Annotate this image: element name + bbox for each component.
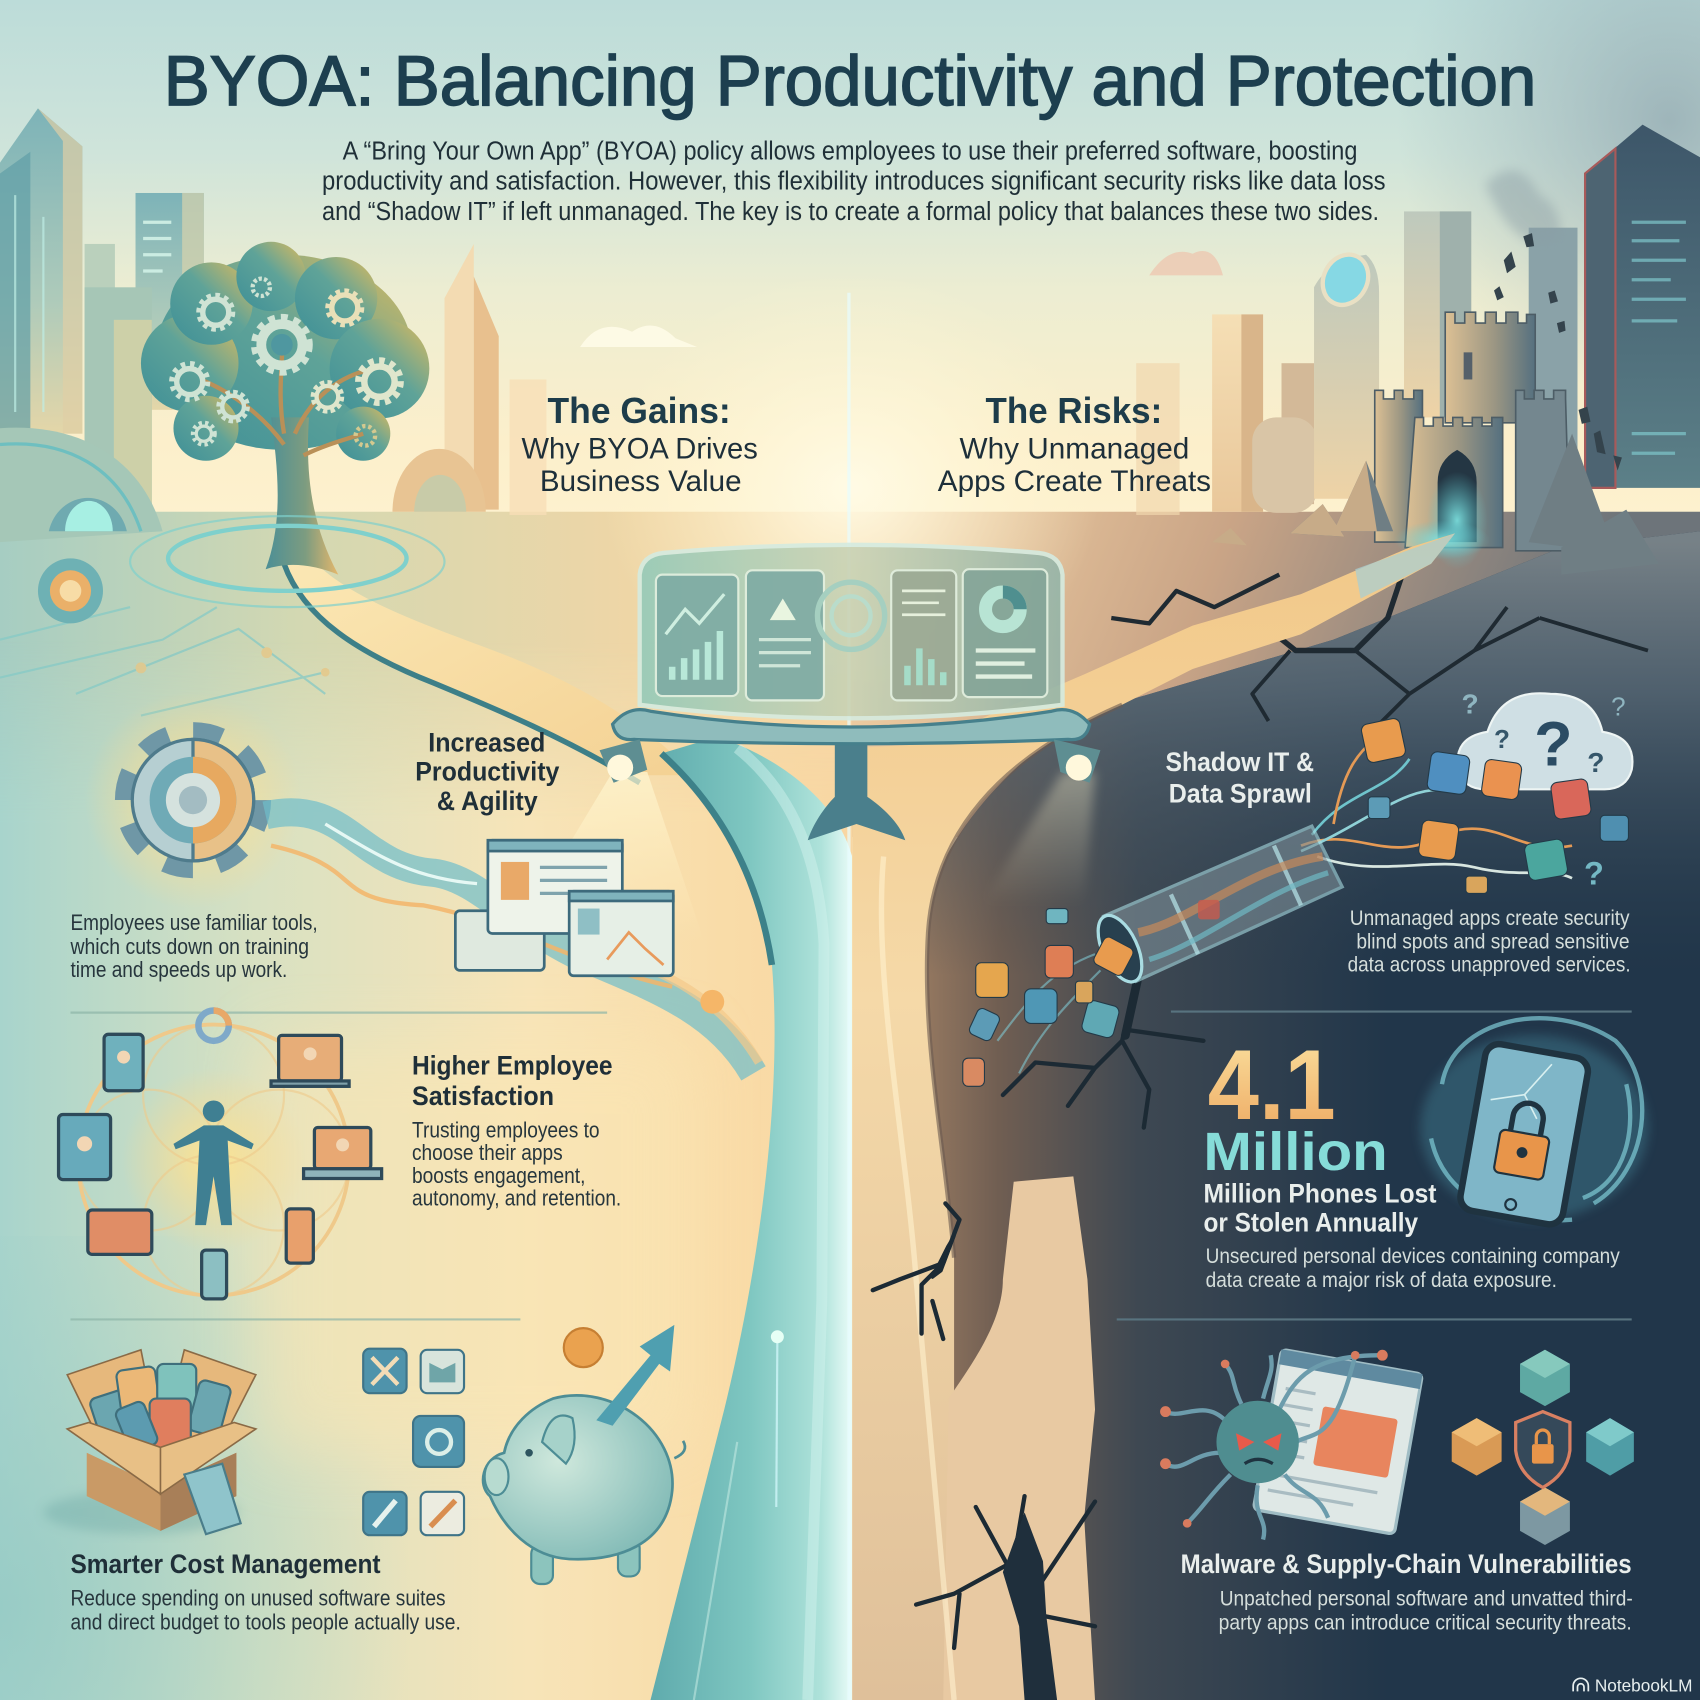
left spotlight lamp bbox=[600, 739, 647, 783]
big word Million: Million bbox=[1203, 1122, 1388, 1182]
castle in ruins bbox=[1212, 233, 1659, 575]
big number 4.1: 4.1 bbox=[1208, 1030, 1336, 1141]
text: productivity description: time and speeds up work. bbox=[70, 957, 287, 982]
text: shadow IT description bbox=[1348, 905, 1631, 976]
glass pipe bbox=[1089, 826, 1342, 988]
icon: glass piggy bank with arrow bbox=[483, 1325, 685, 1584]
stat label bbox=[1203, 1177, 1437, 1238]
circuit rings at roots bbox=[130, 516, 445, 607]
icon: question cloud bbox=[1457, 687, 1632, 892]
heading: increased productivity: & Agility bbox=[437, 785, 538, 816]
text: satisfaction description bbox=[412, 1117, 621, 1211]
tree of gears bbox=[130, 242, 445, 607]
gears on tree bbox=[172, 279, 400, 446]
data stream flow bbox=[266, 812, 759, 1073]
heading: increased productivity: Increased bbox=[428, 726, 545, 757]
futuristic dome and arch bbox=[0, 428, 486, 542]
heading: increased productivity bbox=[415, 726, 559, 816]
cracked ground bbox=[1111, 553, 1648, 726]
text: productivity description bbox=[70, 910, 318, 982]
icon: supply chain cubes and shield bbox=[1452, 1350, 1634, 1545]
stat label: Million Phones Lost bbox=[1203, 1177, 1437, 1208]
text: phone risk description bbox=[1206, 1243, 1620, 1292]
heading: shadow IT: Data Sprawl bbox=[1169, 777, 1312, 808]
intro paragraph: productivity and satisfaction. However, this flexibility introduces significant security risks like data loss bbox=[322, 168, 1386, 196]
text: productivity description: which cuts down on training bbox=[70, 934, 309, 959]
text: cost description bbox=[70, 1586, 461, 1635]
text: phone risk description: Unsecured personal devices containing company bbox=[1206, 1243, 1620, 1268]
heading: employee satisfaction: Satisfaction bbox=[412, 1080, 554, 1111]
text: productivity description: Employees use familiar tools, bbox=[70, 910, 318, 935]
panel: increased productivity bbox=[70, 692, 759, 1073]
icon: virus with tentacles bbox=[1160, 1350, 1388, 1540]
large road cracks bbox=[873, 970, 1203, 1700]
heading: employee satisfaction: Higher Employee bbox=[412, 1049, 613, 1080]
heading: cost management: Smarter Cost Management bbox=[70, 1548, 381, 1579]
dashboard panes bbox=[656, 569, 1047, 700]
panel: employee satisfaction bbox=[59, 1010, 621, 1299]
heading: the gains: Why BYOA Drives bbox=[521, 434, 758, 466]
heading: the gains: The Gains: bbox=[548, 391, 731, 431]
dashboard charts bbox=[666, 582, 1035, 685]
panel: lost phones statistic bbox=[1203, 1018, 1648, 1292]
app icon cluster bbox=[1360, 717, 1628, 893]
orbit badge bbox=[38, 558, 103, 623]
icon: infected browser window bbox=[1253, 1349, 1422, 1534]
heading: the risks: The Risks: bbox=[986, 391, 1162, 431]
icon: glowing gear bbox=[85, 692, 301, 909]
bridge deck bbox=[613, 710, 1090, 744]
heading: the risks bbox=[938, 391, 1211, 498]
intro paragraph: A “Bring Your Own App” (BYOA) policy allows employees to use their preferred software, boosting bbox=[343, 137, 1357, 165]
intro paragraph: and “Shadow IT” if left unmanaged. The key is to create a formal policy that balances these two sides. bbox=[322, 198, 1379, 226]
text: shadow IT description: blind spots and spread sensitive bbox=[1356, 929, 1630, 954]
heading: malware: Malware & Supply-Chain Vulnerabilities bbox=[1181, 1548, 1632, 1579]
tangled data wires bbox=[1301, 737, 1572, 878]
icon: question cloud: ? bbox=[1461, 687, 1479, 719]
icon grid: tools bbox=[363, 1349, 464, 1535]
text: cost description: and direct budget to tools people actually use. bbox=[70, 1610, 461, 1635]
heading: increased productivity: Productivity bbox=[415, 756, 559, 787]
heading: shadow IT: Shadow IT & bbox=[1165, 746, 1314, 777]
glow at horizon bbox=[602, 271, 1100, 705]
dashboard bridge bbox=[600, 545, 1100, 840]
icon: cracked phone in vortex bbox=[1420, 1018, 1648, 1227]
panel: cost management bbox=[43, 1325, 685, 1635]
heading: shadow IT bbox=[1165, 746, 1314, 808]
text: malware description: Unpatched personal software and unvatted third- bbox=[1220, 1586, 1633, 1611]
text: cost description: Reduce spending on unused software suites bbox=[70, 1586, 446, 1611]
tree foliage bbox=[141, 242, 429, 461]
left city skyline bbox=[0, 108, 697, 520]
icon: person among devices bbox=[59, 1010, 382, 1299]
text: satisfaction description: choose their apps bbox=[412, 1140, 563, 1165]
stat label: or Stolen Annually bbox=[1203, 1207, 1418, 1238]
intro paragraph bbox=[322, 137, 1386, 226]
bridge pillar bbox=[808, 729, 905, 840]
text: satisfaction description: boosts engagement, bbox=[412, 1163, 585, 1188]
heading: the risks: Why Unmanaged bbox=[960, 434, 1189, 466]
circuit traces on left ground bbox=[0, 607, 330, 716]
scattered app icons bbox=[963, 909, 1135, 1086]
right branch road broken by cracks bbox=[852, 533, 1455, 1700]
text: phone risk description: data create a major risk of data exposure. bbox=[1206, 1267, 1557, 1292]
heading: the gains: Business Value bbox=[540, 466, 742, 498]
spotlight cones bbox=[510, 772, 1095, 943]
icon: overflowing software box bbox=[43, 1350, 256, 1534]
panel: shadow IT bbox=[963, 687, 1632, 1086]
tree branches bbox=[201, 336, 374, 455]
right spotlight lamp bbox=[1054, 739, 1100, 783]
tree trunk bbox=[266, 417, 338, 575]
dark risk terrain bbox=[919, 531, 1700, 1700]
central teal road bbox=[651, 293, 852, 1700]
icon: question cloud: ? bbox=[1587, 746, 1604, 778]
app window cards bbox=[455, 840, 673, 976]
right city skyline bbox=[1136, 125, 1700, 515]
NotebookLM watermark: NotebookLM bbox=[1595, 1675, 1692, 1695]
main title: BYOA: Balancing Productivity and Protection bbox=[164, 41, 1536, 120]
icon: question cloud: ? bbox=[1611, 692, 1626, 722]
text: shadow IT description: data across unapproved services. bbox=[1348, 951, 1631, 976]
panel: malware and supply chain bbox=[1160, 1349, 1634, 1635]
heading: the risks: Apps Create Threats bbox=[938, 466, 1211, 498]
text: malware description: party apps can introduce critical security threats. bbox=[1219, 1610, 1632, 1635]
text: malware description bbox=[1219, 1586, 1633, 1635]
icon: question cloud: ? bbox=[1494, 724, 1510, 754]
text: satisfaction description: autonomy, and retention. bbox=[412, 1186, 621, 1211]
icon: question cloud: ? bbox=[1584, 856, 1604, 892]
heading: employee satisfaction bbox=[412, 1049, 613, 1111]
heading: the gains bbox=[521, 391, 758, 498]
text: satisfaction description: Trusting employees to bbox=[412, 1117, 600, 1142]
left branch of road with tree roots bbox=[284, 548, 694, 783]
icon: question cloud: ? bbox=[1534, 709, 1573, 779]
text: shadow IT description: Unmanaged apps create security bbox=[1350, 905, 1630, 930]
glass dashboard bbox=[640, 545, 1062, 718]
